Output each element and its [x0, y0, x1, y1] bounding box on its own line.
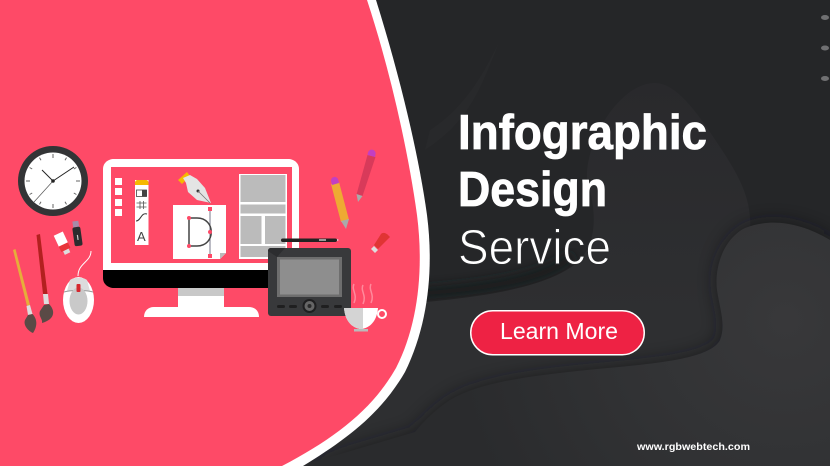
icon: computer mouse — [63, 251, 94, 323]
tool palette — [135, 180, 148, 245]
icon: yellow paint brush — [13, 249, 36, 333]
heading line: Design: Design — [458, 163, 607, 217]
heading line: Infographic: Infographic — [458, 106, 707, 160]
monitor base bar — [103, 270, 299, 288]
monitor screen — [111, 167, 292, 263]
monitor frame — [103, 159, 299, 270]
icon: white usb drive — [54, 231, 72, 256]
icon: yellow pencil — [331, 177, 349, 229]
icon: red pencil — [356, 150, 376, 202]
red curved panel — [0, 0, 420, 466]
icon: coffee cup with steam — [344, 284, 386, 332]
icon: graphics tablet — [268, 248, 351, 316]
monitor stand — [144, 288, 259, 317]
icon: red usb stick — [371, 233, 390, 253]
icon: wall clock — [18, 146, 88, 216]
decorative dots — [821, 15, 829, 81]
button: Learn More: Learn More — [500, 318, 618, 344]
icon: black usb drive — [71, 221, 83, 246]
white curved divider — [0, 0, 430, 466]
website url: www.rgbwebtech.com — [636, 441, 750, 453]
paper with letter D — [173, 205, 226, 259]
tool palette: A — [137, 229, 146, 244]
icon: red paint brush — [36, 234, 53, 323]
monitor — [103, 159, 299, 317]
pen nib tool — [178, 172, 211, 203]
page layout panel — [239, 174, 287, 259]
heading — [458, 106, 707, 275]
icon: stylus pen — [281, 238, 339, 242]
side squares — [115, 178, 122, 216]
button: Learn More — [471, 311, 644, 355]
heading line: Service: Service — [458, 221, 611, 275]
